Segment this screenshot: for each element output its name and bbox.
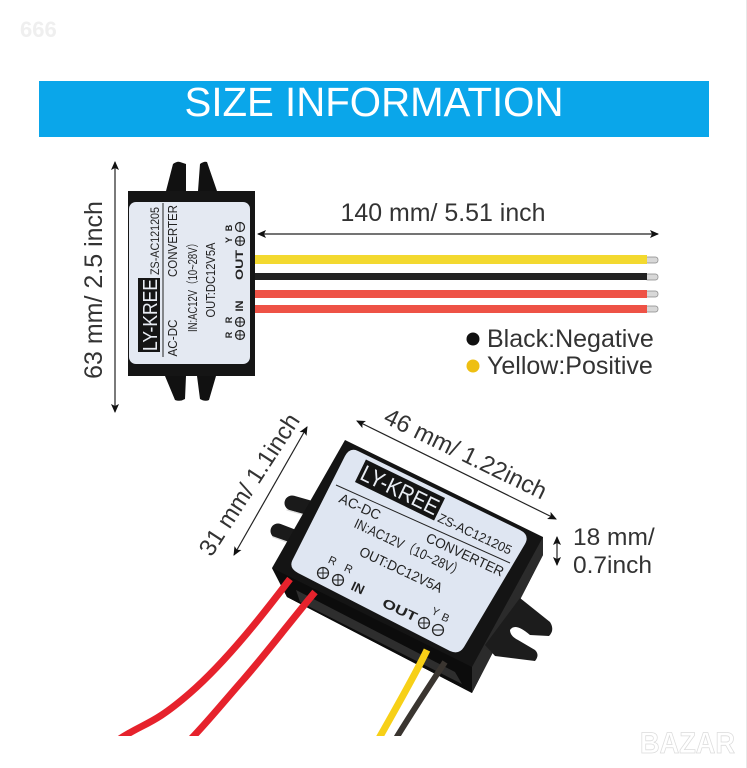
converter: perspective view: ZS-AC121205 bbox=[435, 510, 514, 558]
converter: top view: OUT bbox=[234, 250, 246, 280]
case bbox=[272, 440, 543, 693]
converter: top view: R bbox=[224, 316, 234, 323]
converter: perspective view: R bbox=[326, 554, 338, 568]
mounting tabs: left bbox=[273, 503, 320, 543]
dimension: 46 mm: 46 mm/ 1.22inch bbox=[380, 403, 551, 505]
legend: wire colours bbox=[466, 325, 654, 380]
converter: top view: B bbox=[224, 224, 234, 231]
converter: perspective view: CONVERTER bbox=[424, 529, 507, 579]
converter: perspective view bbox=[100, 440, 552, 748]
converter: top view: Y bbox=[224, 237, 234, 243]
dimension: 18 mm bbox=[557, 524, 655, 579]
converter: perspective view: IN:AC12V（10~28V） bbox=[352, 515, 466, 580]
converter: top view: LY-KREE bbox=[140, 279, 162, 351]
converter: perspective view: OUT:DC12V5A bbox=[357, 543, 446, 596]
converter: top view: ZS-AC121205 bbox=[148, 207, 162, 275]
converter: top view: IN bbox=[234, 300, 246, 312]
converter: top view: R bbox=[224, 331, 234, 338]
banner: size information: SIZE INFORMATION bbox=[184, 79, 564, 125]
dimension: 31 mm: 31 mm/ 1.1inch bbox=[194, 409, 306, 561]
converter: perspective view: B bbox=[439, 611, 451, 625]
legend: wire colours: Black:Negative bbox=[487, 325, 654, 353]
converter: perspective view: AC-DC bbox=[337, 490, 383, 523]
label text: LY-KREE bbox=[357, 460, 443, 520]
converter: top view: IN:AC12V（10~28V） bbox=[186, 238, 200, 332]
converter: perspective view: IN bbox=[349, 578, 367, 597]
banner: size information bbox=[39, 79, 709, 137]
dimension: length 140 mm: 140 mm/ 5.51 inch bbox=[340, 200, 546, 227]
converter: perspective view: R bbox=[342, 562, 354, 576]
dimension: 18 mm: 18 mm/ bbox=[573, 524, 655, 551]
label plate bbox=[291, 450, 527, 652]
legend: wire colours: Yellow:Positive bbox=[487, 352, 653, 380]
converter: top view bbox=[128, 162, 255, 401]
converter: perspective view: OUT bbox=[380, 595, 420, 625]
dimension: 18 mm: 0.7inch bbox=[573, 552, 652, 579]
wires bbox=[100, 579, 445, 748]
mounting tabs: right bbox=[485, 598, 552, 661]
wires: top-view converter bbox=[255, 255, 658, 313]
converter: perspective view: Y bbox=[429, 605, 442, 620]
watermark: 666: 666 bbox=[20, 17, 57, 42]
watermark: BAZAR: BAZAR bbox=[640, 727, 735, 760]
converter: top view: CONVERTER bbox=[166, 205, 180, 277]
converter: top view: OUT:DC12V5A bbox=[204, 242, 218, 318]
dimension: height 63 mm: 63 mm/ 2.5 inch bbox=[80, 201, 108, 379]
converter: top view: AC-DC bbox=[166, 320, 180, 356]
